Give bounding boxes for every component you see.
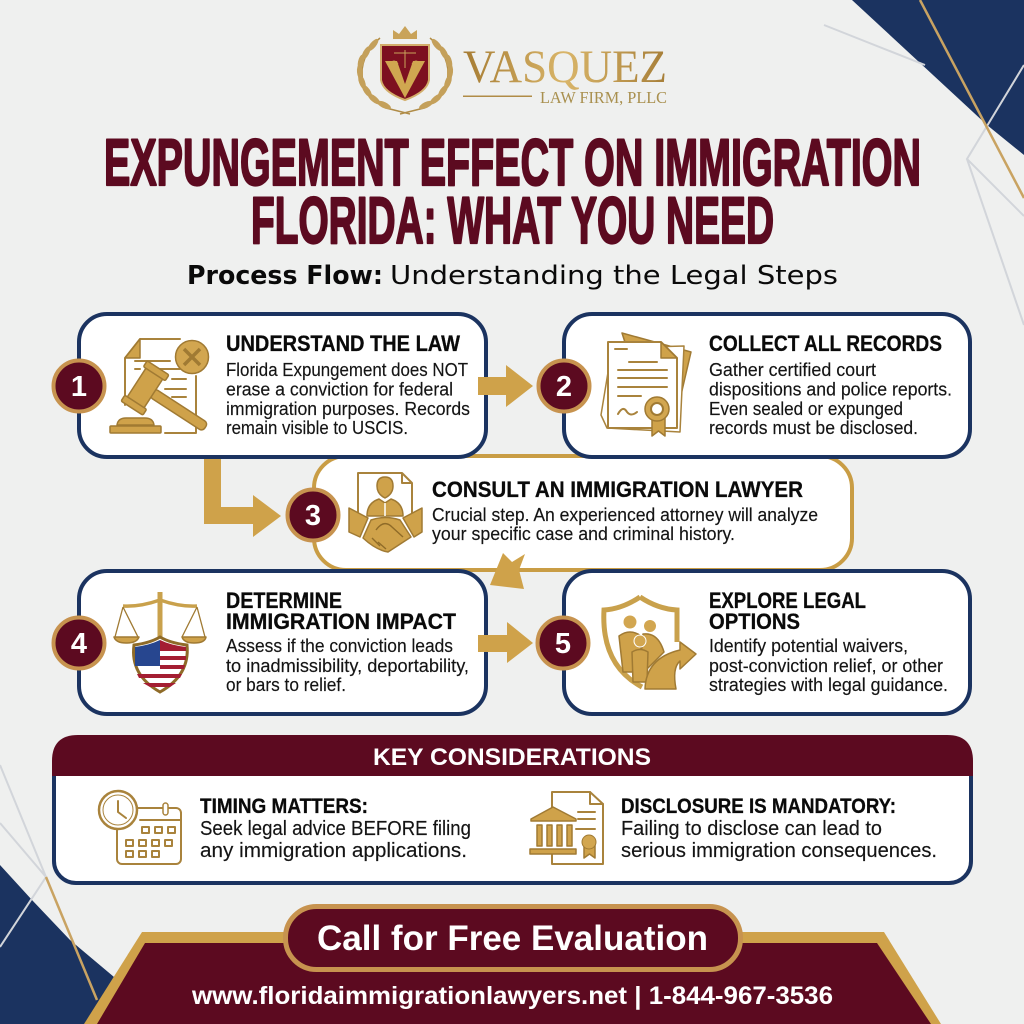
badge: number 4: 4 [71, 628, 87, 660]
step 4 body [226, 635, 469, 695]
logo laurel wreath left [356, 37, 410, 114]
arrow: step 1 to step 3 [204, 459, 281, 537]
step 4 heading: IMMIGRATION IMPACT [226, 609, 456, 634]
step 3 heading: CONSULT AN IMMIGRATION LAWYER [432, 477, 803, 502]
panel: step 1 understand the law [79, 314, 486, 457]
timing matters body: any immigration applications. [200, 839, 467, 862]
step 4 body: Assess if the conviction leads [226, 635, 453, 656]
panel: key considerations [52, 735, 973, 883]
icon: scales and flag shield [114, 592, 206, 692]
arrow: step 1 to step 2 [478, 365, 533, 407]
disclosure body: Failing to disclose can lead to [621, 817, 882, 840]
badge: number 5: 5 [555, 628, 571, 660]
disclosure body: serious immigration consequences. [621, 839, 937, 862]
panel: step 4 determine impact [79, 571, 486, 714]
arrow: step 4 to step 5 [478, 622, 533, 663]
badge: number 3 [288, 490, 338, 540]
step 1 body: remain visible to USCIS. [226, 417, 408, 438]
step 1 body: erase a conviction for federal [226, 378, 453, 400]
badge: number 4 [54, 618, 104, 668]
key considerations heading: KEY CONSIDERATIONS [373, 744, 651, 771]
subtitle: Understanding the Legal Steps [390, 261, 838, 291]
logo shield [381, 45, 429, 100]
logo V monogram [385, 61, 425, 98]
badge: number 5 [538, 618, 588, 668]
step 5 body: post-conviction relief, or other [709, 655, 943, 676]
step 5 body: strategies with legal guidance. [709, 674, 948, 695]
step 2 body [709, 359, 952, 438]
step 1 body: immigration purposes. Records [226, 398, 470, 419]
step 3 body: your specific case and criminal history. [432, 523, 735, 544]
icon: clock and calendar [99, 791, 181, 864]
badge: number 2 [538, 360, 590, 412]
timing matters body [200, 817, 471, 862]
disclosure heading: DISCLOSURE IS MANDATORY: [621, 795, 896, 818]
footer banner [84, 932, 941, 1024]
step 5 heading [709, 588, 866, 634]
badge: number 2: 2 [556, 371, 572, 403]
panel: step 3 consult lawyer [314, 456, 852, 570]
logo laurel wreath right [400, 37, 454, 114]
subtitle [187, 261, 838, 291]
firm name: VASQUEZ [463, 41, 667, 93]
step 5 body [709, 635, 948, 695]
timing matters heading: TIMING MATTERS: [200, 795, 368, 818]
footer contact line: www.floridaimmigrationlawyers.net | 1-844-967-3536 [191, 982, 833, 1010]
step 2 body: Even sealed or expunged [709, 398, 903, 419]
panel: step 5 explore legal options [564, 571, 970, 714]
corner decoration: bottom left [0, 765, 114, 1024]
panel: step 2 collect all records [564, 314, 970, 457]
step 4 heading: DETERMINE [226, 588, 342, 613]
step 4 body: to inadmissibility, deportability, [226, 655, 469, 676]
logo [356, 26, 667, 114]
firm subtitle: LAW FIRM, PLLC [540, 88, 667, 107]
icon: lawyer and handshake [349, 473, 422, 552]
subtitle: Process Flow: [187, 261, 383, 291]
badge: number 1: 1 [71, 371, 87, 403]
step 2 body: Gather certified court [709, 359, 876, 380]
timing matters body: Seek legal advice BEFORE filing [200, 817, 471, 840]
corner decoration: top right [824, 0, 1024, 325]
icon: family shield and road arrow [604, 597, 696, 689]
step 1 heading: UNDERSTAND THE LAW [226, 331, 461, 356]
call to action pill: Call for Free Evaluation [317, 919, 708, 958]
logo scales [390, 50, 420, 68]
badge: number 3: 3 [305, 500, 321, 532]
step 3 body [432, 504, 818, 544]
call to action pill [286, 906, 740, 970]
step 3 body: Crucial step. An experienced attorney will analyze [432, 504, 818, 525]
step 1 body: Florida Expungement does NOT [226, 359, 468, 380]
logo rule [463, 96, 532, 97]
step 4 body: or bars to relief. [226, 674, 346, 695]
step 2 heading: COLLECT ALL RECORDS [709, 331, 942, 356]
icon: certificate documents [601, 333, 691, 436]
step 4 heading [226, 588, 456, 634]
step 2 body: dispositions and police reports. [709, 378, 952, 400]
step 5 body: Identify potential waivers, [709, 635, 908, 656]
key considerations header bar [52, 735, 973, 776]
step 5 heading: EXPLORE LEGAL [709, 588, 866, 613]
icon: courthouse and document [530, 792, 603, 864]
logo crown [393, 26, 417, 39]
disclosure body [621, 817, 937, 862]
title [104, 125, 921, 257]
step 5 heading: OPTIONS [709, 609, 800, 634]
badge: number 1 [54, 360, 104, 412]
arrow: step 3 to step 4 [490, 553, 525, 589]
step 1 body [226, 359, 470, 438]
icon: gavel and document [110, 339, 218, 447]
step 2 body: records must be disclosed. [709, 417, 918, 438]
